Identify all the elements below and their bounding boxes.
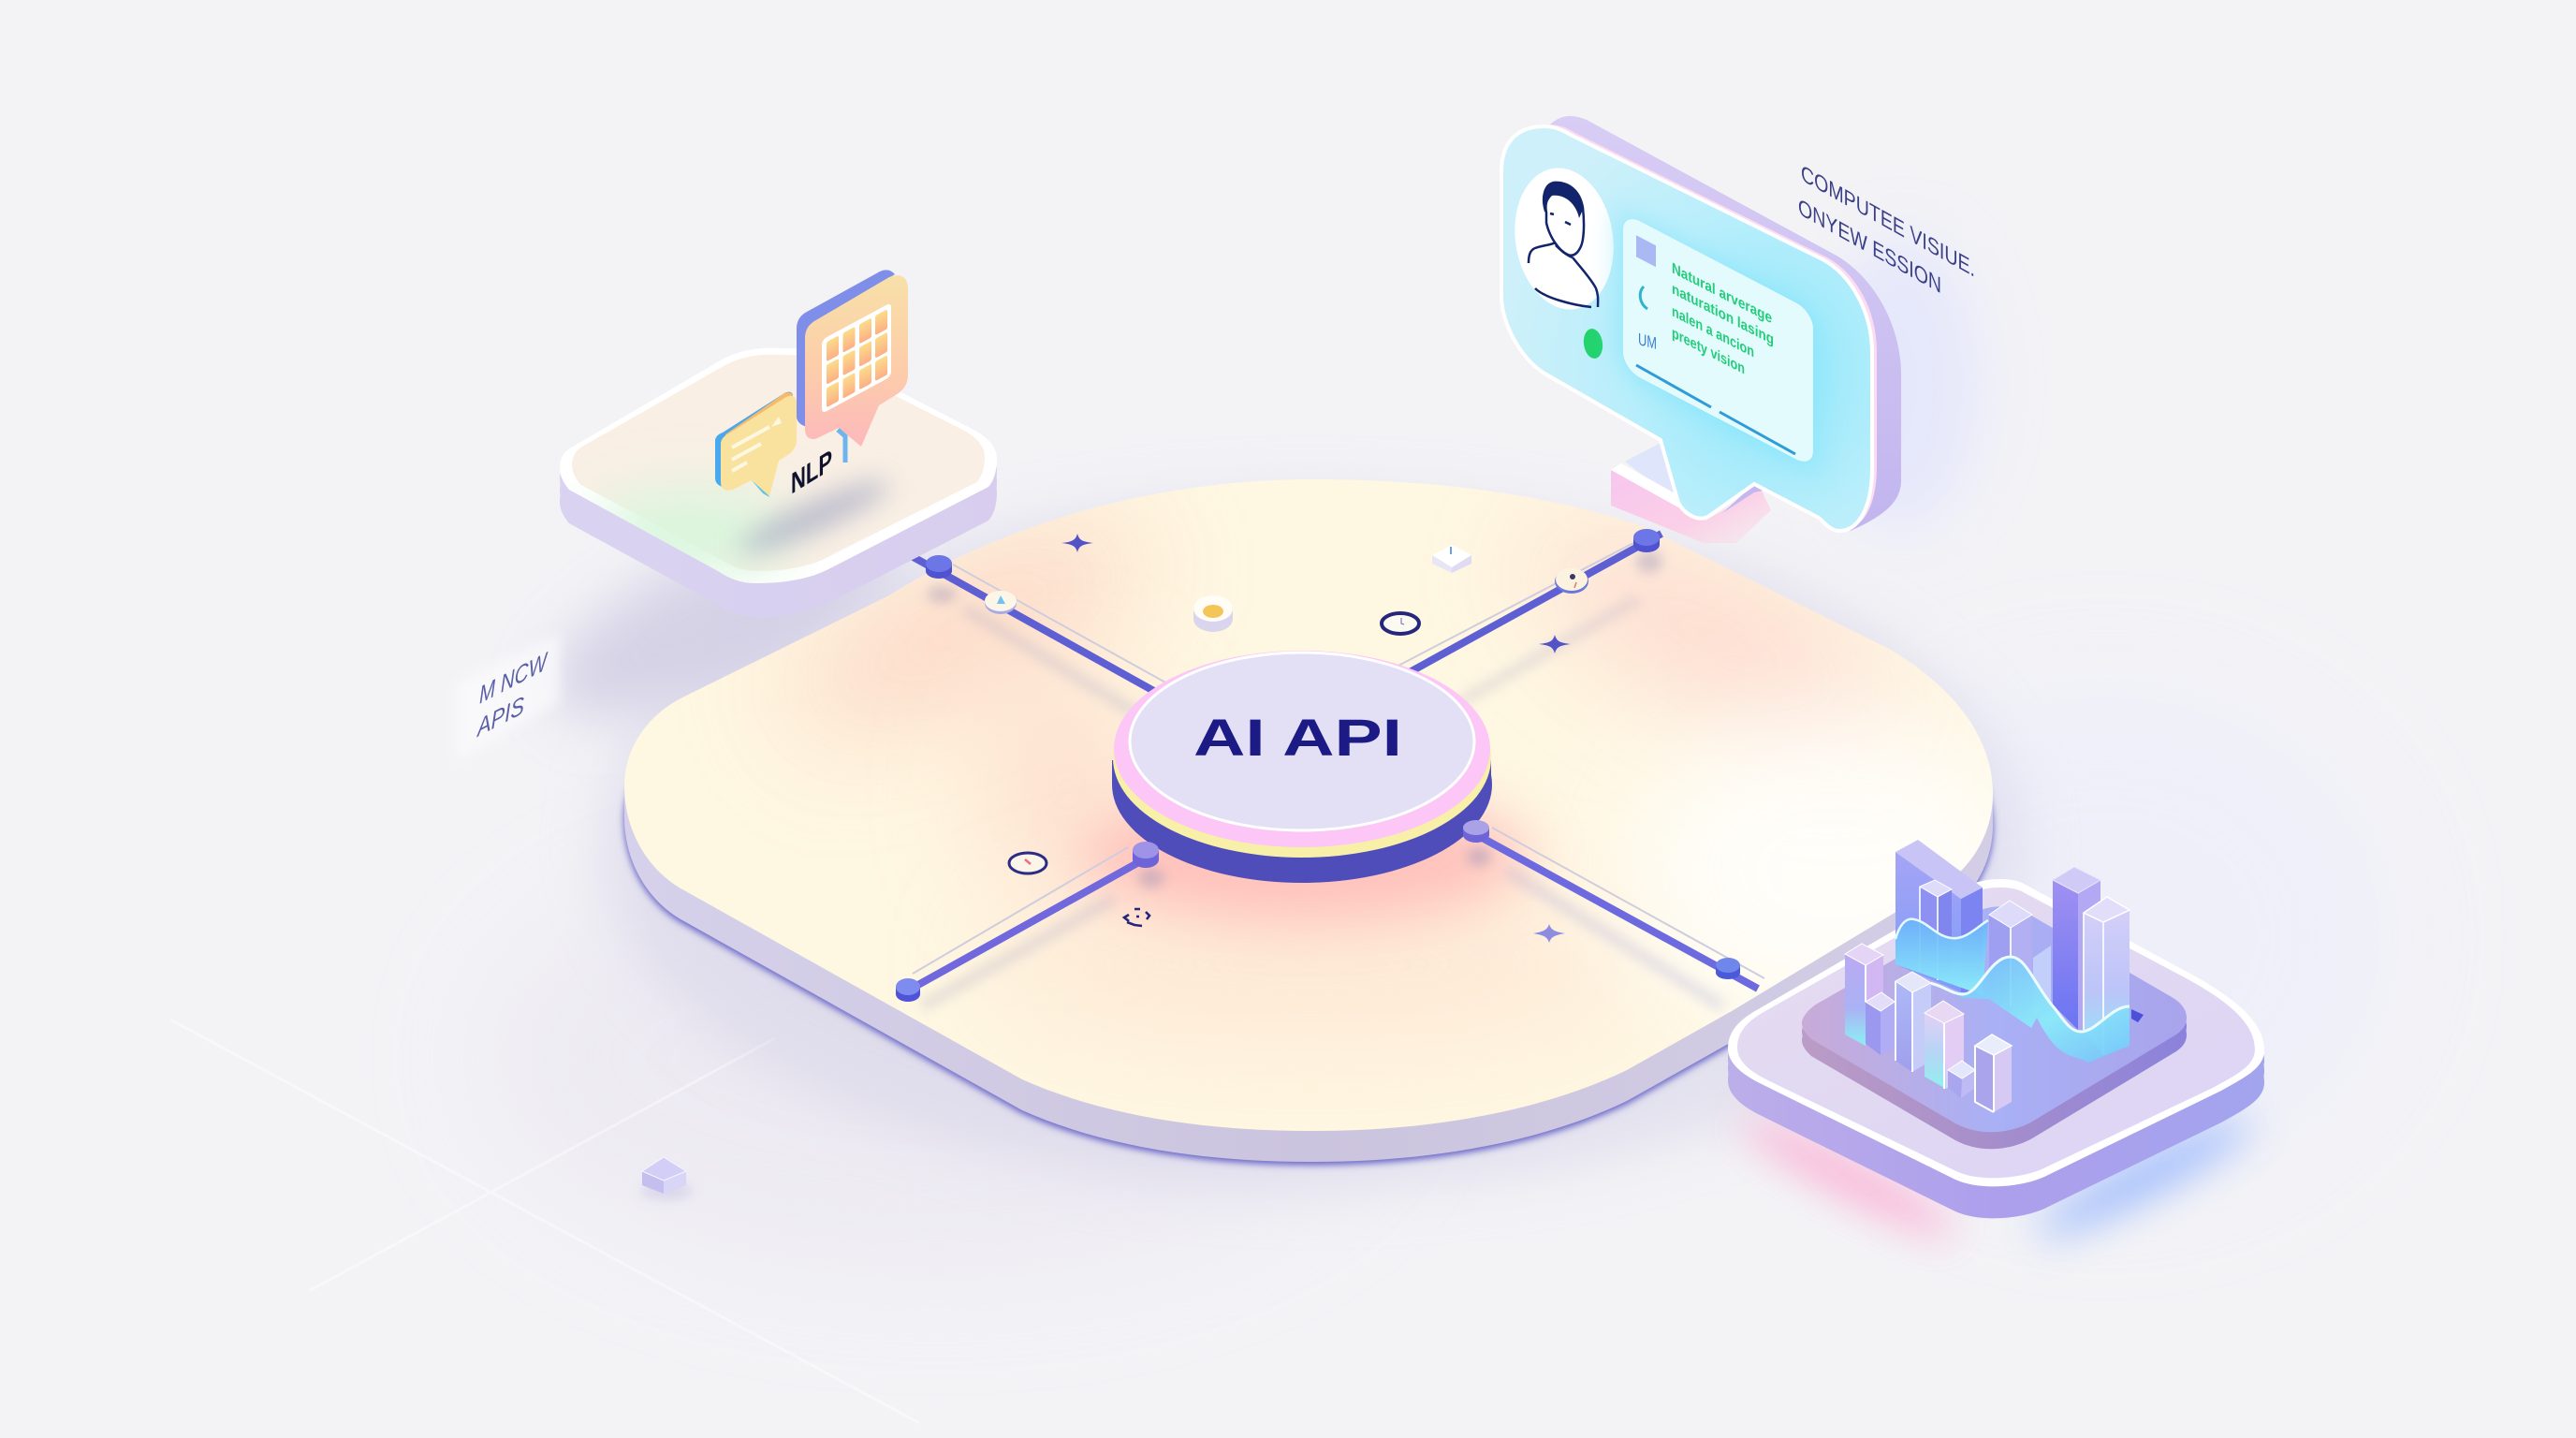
heading: computer vision label: ONYEW ESSION xyxy=(1798,195,1941,299)
card text xyxy=(1672,259,1774,378)
label: new APIs card xyxy=(457,634,559,761)
card text: naturation lasing xyxy=(1672,280,1774,348)
bubble face xyxy=(1501,126,1872,531)
bubble base block xyxy=(1611,443,1771,543)
connector: south-west xyxy=(896,842,1164,1006)
hub label: AI API xyxy=(1193,708,1402,767)
icon: purple cube xyxy=(640,1157,693,1200)
NLP label: NLP xyxy=(791,443,832,501)
bar: tiny xyxy=(1948,1061,1975,1098)
bar: mint xyxy=(1925,1001,1964,1089)
bar: tall right rear xyxy=(2053,867,2100,1030)
ribbon: back wave xyxy=(1895,919,1988,995)
label: new APIs card: M NCW xyxy=(479,646,549,710)
connector: south-east xyxy=(1463,820,1764,1006)
label: new APIs card: APIS xyxy=(476,690,524,742)
icon: white cube xyxy=(1432,545,1471,573)
icon: star right xyxy=(1539,635,1571,653)
panel: NLP platform xyxy=(560,270,997,617)
ribbon: front wave xyxy=(1929,957,2144,1063)
bar: far left xyxy=(1845,944,1883,1046)
icon: grid speech bubble xyxy=(797,270,908,447)
bubble stem xyxy=(838,430,845,462)
info card xyxy=(1617,208,1819,477)
heading: computer vision label: COMPUTEE VISIUE. xyxy=(1801,161,1975,283)
connector badge xyxy=(1555,568,1588,594)
icon: star top xyxy=(1061,534,1093,552)
bar: mid left xyxy=(1895,972,1931,1072)
bar: front xyxy=(1975,1034,2012,1112)
panel: main platform xyxy=(624,479,2041,1165)
card text: Natural arverage xyxy=(1672,259,1772,327)
isometric AI API scene xyxy=(476,116,2273,1260)
card label: UM xyxy=(1638,329,1657,353)
inner raised tray xyxy=(1802,906,2187,1149)
connector badge xyxy=(985,591,1017,614)
icon: message speech bubble xyxy=(715,392,797,497)
icon: scan glyph xyxy=(1124,909,1149,926)
bar: inner back xyxy=(1920,880,1952,980)
grid table xyxy=(822,302,891,414)
avatar xyxy=(1505,161,1623,316)
icon: clock ring top xyxy=(1382,613,1419,634)
card text: nalen a ancion xyxy=(1672,302,1754,361)
icon: coin xyxy=(1193,595,1233,632)
card text: preety vision xyxy=(1672,324,1745,378)
bar: centre xyxy=(1989,901,2032,1028)
floating shadow xyxy=(734,471,895,563)
bubble depth xyxy=(1506,116,1901,531)
connector: north-east xyxy=(1397,529,1662,702)
connector: north-west xyxy=(910,555,1179,740)
status dot xyxy=(1582,328,1604,360)
panel: chart platform xyxy=(1728,840,2264,1248)
bar: back block xyxy=(1895,840,1983,992)
platform shadow xyxy=(523,479,2022,1189)
icon: star lower right xyxy=(1533,924,1565,943)
icon: clock ring lower left xyxy=(1009,853,1046,873)
central hub: AI API xyxy=(1112,651,1492,883)
bar: tall right front xyxy=(2084,897,2130,1055)
bar chart and wave ribbons xyxy=(1845,840,2144,1112)
bar: short left xyxy=(1866,992,1895,1055)
bar: small rear xyxy=(2033,946,2051,1016)
panel: computer vision speech bubble xyxy=(1501,116,1984,543)
